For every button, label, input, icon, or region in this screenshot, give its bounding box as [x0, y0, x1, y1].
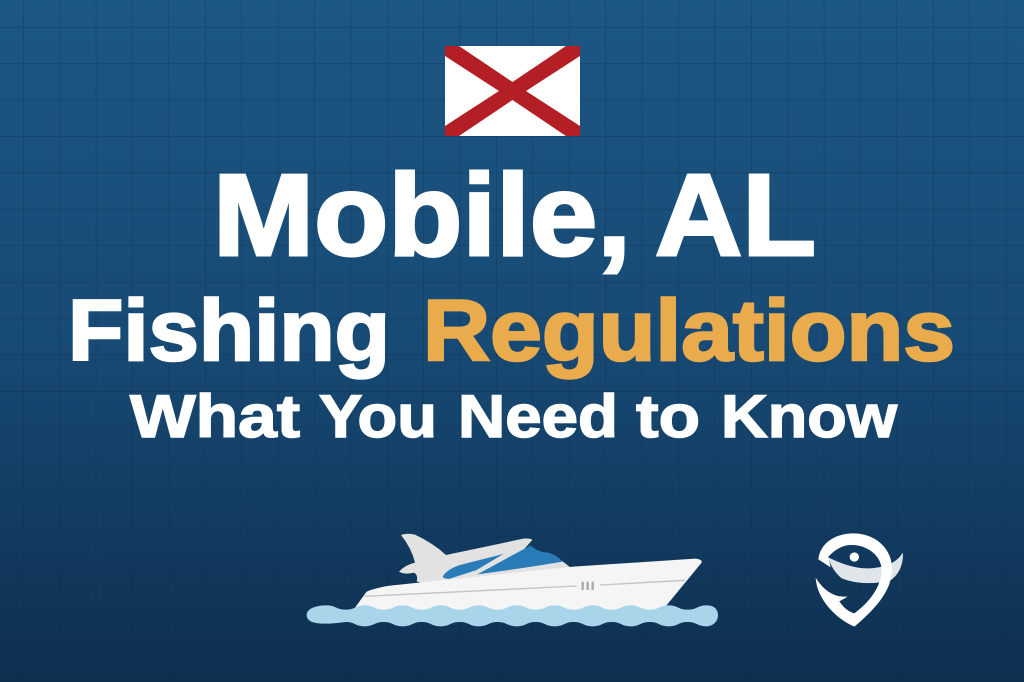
icon: motor yacht on waves	[307, 534, 718, 626]
icon: Alabama flag	[445, 46, 580, 136]
water waves	[307, 605, 718, 626]
subheading: What You Need to Know: What	[130, 383, 300, 450]
heading: Fishing Regulations: Fishing	[68, 283, 390, 379]
title: Mobile, AL: Mobile,	[213, 150, 631, 280]
fish eye	[850, 552, 859, 562]
subheading: What You Need to Know: Know	[721, 383, 897, 450]
subheading: What You Need to Know: to	[636, 383, 700, 450]
subheading: What You Need to Know: Need	[458, 383, 618, 450]
fish tail band	[828, 553, 903, 583]
subheading: What You Need to Know	[130, 383, 897, 450]
title: Mobile, AL: AL	[655, 150, 816, 280]
boat flybridge	[399, 534, 572, 583]
fish body and hook	[816, 533, 892, 627]
boat hull	[353, 559, 702, 610]
heading: Fishing Regulations	[68, 283, 955, 379]
heading: Fishing Regulations: Regulations	[423, 283, 955, 379]
icon: fish and hook logo	[816, 533, 903, 627]
hull stripe and vents	[365, 580, 685, 596]
subheading: What You Need to Know: You	[319, 383, 437, 450]
title: Mobile, AL	[213, 150, 816, 280]
boat windows	[443, 545, 563, 579]
